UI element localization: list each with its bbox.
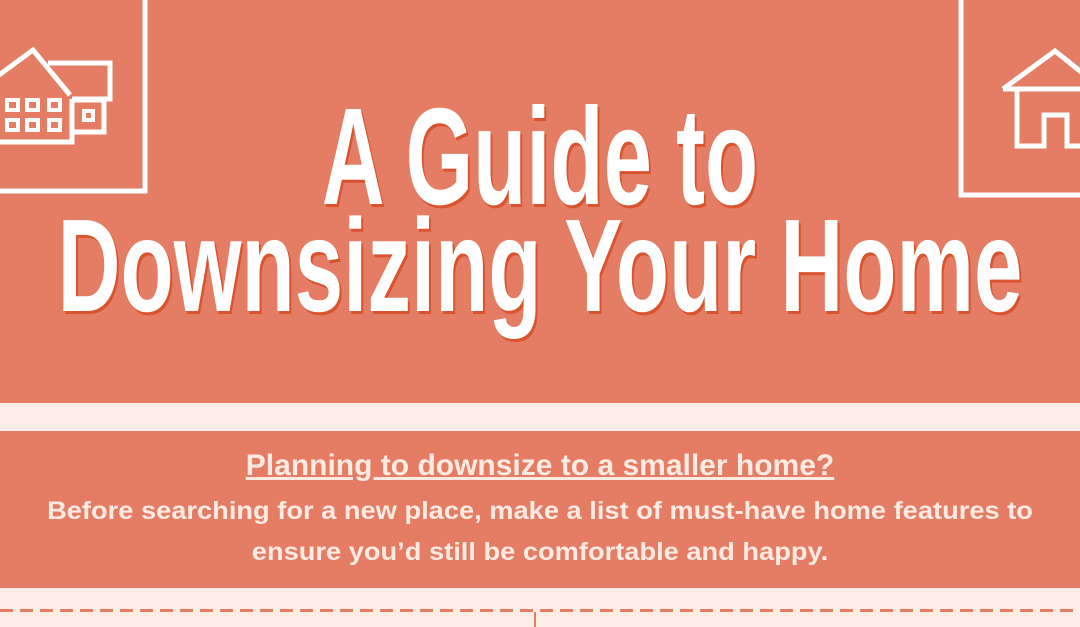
header background	[0, 0, 1080, 403]
text: Downsizing Your Home	[58, 192, 1022, 339]
title: A Guide to	[322, 80, 758, 234]
panel: intro	[0, 431, 1080, 588]
intro text: Before searching for a new place, make a list of must-have home features to	[47, 497, 1033, 525]
divider dashed	[0, 609, 1080, 612]
intro heading: Planning to downsize to a smaller home?	[246, 449, 834, 482]
icon: right house frame	[958, 0, 1080, 198]
intro text	[47, 497, 1033, 566]
intro text: ensure you’d still be comfortable and happy.	[252, 538, 828, 566]
icon: left house frame	[0, 0, 148, 194]
